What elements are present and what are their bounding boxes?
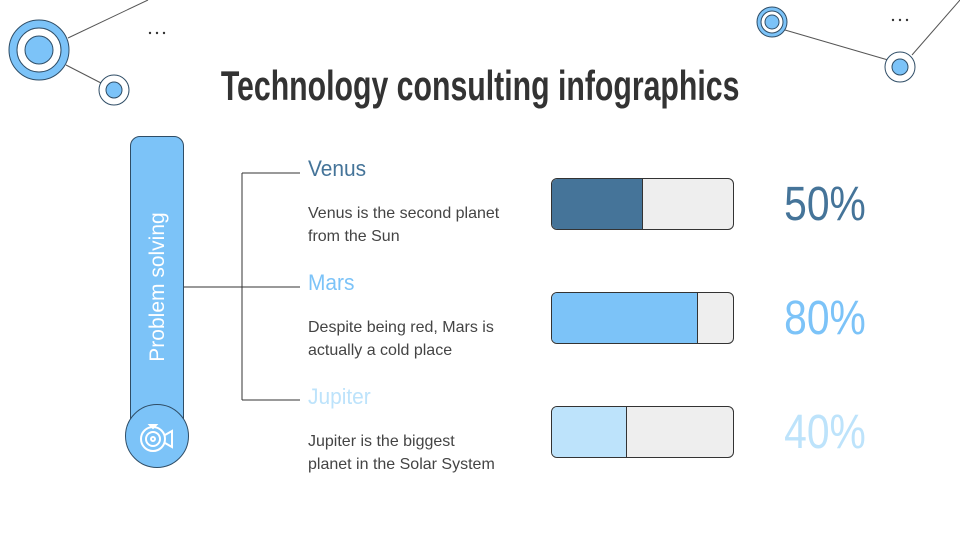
- bar: 80%: [551, 292, 734, 344]
- bar: 40%: [551, 406, 734, 458]
- item: Mars: [308, 270, 494, 359]
- item: Venus: Venus is the second planet: [308, 205, 499, 222]
- bar: 50%: [551, 178, 734, 230]
- item: Mars: Mars: [308, 270, 354, 295]
- item: Jupiter: Jupiter: [308, 384, 371, 409]
- item: Jupiter: [308, 384, 495, 473]
- item: Mars: Despite being red, Mars is: [308, 319, 494, 336]
- item: Venus: from the Sun: [308, 228, 400, 245]
- title: Technology consulting infographics: [221, 62, 739, 109]
- item: Mars: actually a cold place: [308, 342, 452, 359]
- vertical banner: Problem solving: Problem solving: [146, 212, 169, 362]
- percent 80: 80%: [784, 292, 866, 345]
- vertical banner: Problem solving: [130, 136, 184, 436]
- percent 40: 40%: [784, 406, 866, 459]
- percent 50: 50%: [784, 178, 866, 231]
- item: Jupiter: planet in the Solar System: [308, 456, 495, 473]
- item: Venus: Venus: [308, 156, 366, 181]
- icon: target camera: [125, 404, 189, 468]
- item: Venus: [308, 156, 500, 245]
- item: Jupiter: Jupiter is the biggest: [308, 433, 455, 450]
